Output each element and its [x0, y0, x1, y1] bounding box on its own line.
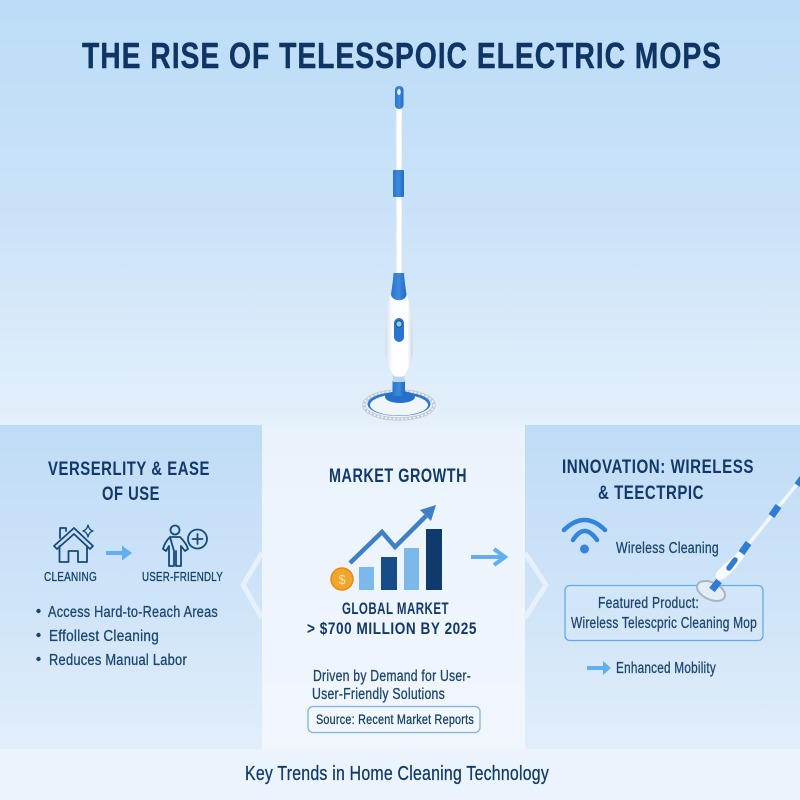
heading: OF USE — [102, 483, 160, 505]
handle hook — [395, 86, 404, 109]
market figure — [307, 599, 477, 638]
arrow — [471, 549, 505, 565]
icon: user with plus — [163, 526, 207, 566]
pole — [396, 100, 402, 280]
driver text — [312, 668, 471, 703]
driver text: User-Friendly Solutions — [312, 686, 445, 703]
panel: versatility and ease of use — [0, 425, 262, 750]
source box: Source: Recent Market Reports — [316, 711, 474, 727]
icon: clean house — [54, 525, 93, 562]
panel: market growth — [262, 425, 525, 750]
market figure: GLOBAL MARKET — [342, 599, 449, 618]
panel: innovation — [525, 425, 800, 750]
icon: wifi — [564, 520, 605, 554]
source box — [308, 706, 480, 732]
arrow — [106, 546, 132, 560]
driver text: Driven by Demand for User- — [313, 668, 471, 685]
arrow — [587, 661, 611, 675]
bar chart — [350, 505, 442, 590]
icon labels: USER-FRIENDLY — [142, 569, 223, 584]
icon: coin: $ — [338, 572, 346, 587]
power button — [394, 318, 404, 342]
mop body — [385, 295, 413, 377]
wifi label: Wireless Cleaning — [616, 540, 719, 557]
chevron — [525, 553, 546, 618]
illustration: telescopic electric mop — [364, 86, 434, 419]
chevron — [243, 553, 262, 618]
blue grip — [391, 273, 406, 300]
heading — [48, 458, 210, 505]
illustration: small mop — [694, 478, 800, 605]
icon labels — [44, 569, 223, 584]
bullet list — [36, 604, 218, 669]
icon: coin — [331, 568, 353, 590]
mobility label: Enhanced Mobility — [616, 660, 716, 677]
heading: & TEECTRPIC — [598, 482, 704, 504]
bullet list: Access Hard-to-Reach Areas — [48, 604, 218, 621]
featured product box: Featured Product: — [598, 595, 699, 612]
heading: VERSERLITY & EASE — [48, 458, 210, 480]
bullet list: Effollest Cleaning — [49, 628, 159, 645]
mop neck — [392, 374, 405, 396]
pole collar — [393, 170, 404, 197]
heading — [562, 456, 754, 504]
featured product box — [565, 586, 763, 640]
heading: MARKET GROWTH — [329, 465, 467, 487]
footer band — [0, 749, 800, 800]
market figure: > $700 MILLION BY 2025 — [307, 619, 477, 638]
mop pad — [364, 391, 434, 419]
bullet list: Reduces Manual Labor — [49, 652, 187, 669]
footer band: Key Trends in Home Cleaning Technology — [245, 763, 549, 785]
icon labels: CLEANING — [44, 569, 97, 584]
